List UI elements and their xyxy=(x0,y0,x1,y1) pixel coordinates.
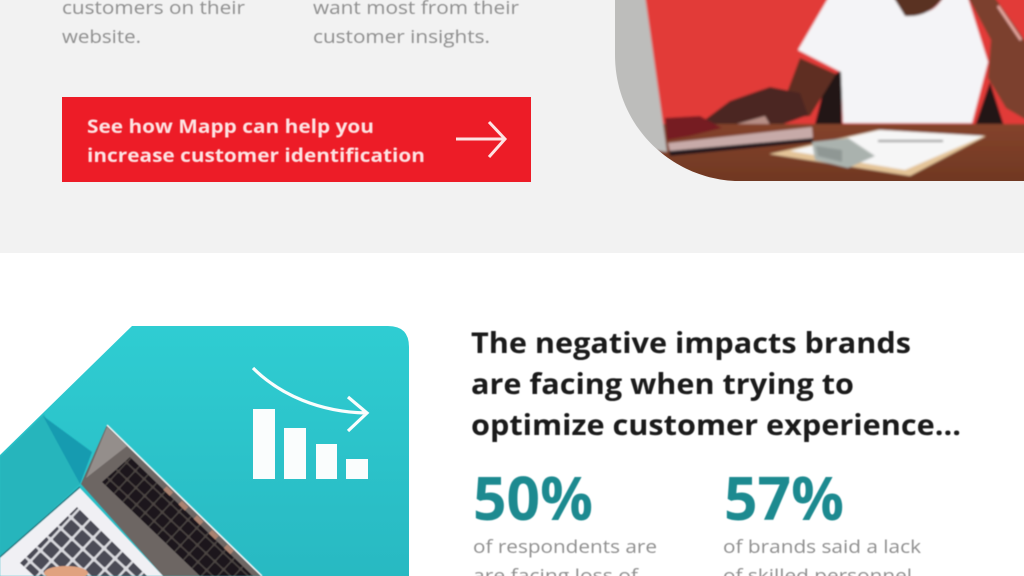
hand xyxy=(705,86,808,126)
glass xyxy=(812,138,875,168)
chair xyxy=(815,70,1004,126)
laptop shadow xyxy=(43,416,92,484)
heading: negative impacts: optimize customer experience... xyxy=(471,405,961,444)
table xyxy=(656,122,1024,181)
laptop lid xyxy=(81,425,262,576)
photo: man working at a laptop xyxy=(610,0,1024,185)
top section background xyxy=(0,0,1024,253)
call to action button: See how Mapp can help you xyxy=(87,114,374,139)
text block: customers on their website xyxy=(62,0,246,49)
stat: 57 percent: 57% xyxy=(724,456,844,538)
laptop base xyxy=(668,127,813,152)
stat: 57 percent xyxy=(723,456,922,576)
panel: teal laptop image xyxy=(0,326,409,576)
stat: 50 percent: 50% xyxy=(473,456,593,538)
lid keyboard xyxy=(102,457,253,576)
stat: 57 percent: of brands said a lack xyxy=(723,535,922,559)
hand xyxy=(44,566,88,576)
laptop base xyxy=(0,488,163,576)
heading: negative impacts: The negative impacts brands xyxy=(471,323,911,362)
heading: negative impacts: are facing when trying to xyxy=(471,364,854,403)
stat: 50 percent xyxy=(473,456,657,576)
clipboard xyxy=(769,130,986,176)
text block: want most from their customer insights: customer insights. xyxy=(313,25,490,49)
icon: declining bar chart with arrow xyxy=(253,368,368,479)
call to action button: increase customer identification xyxy=(87,143,425,168)
stat: 50 percent: of respondents are xyxy=(473,535,657,559)
far arm xyxy=(967,0,1024,122)
call to action button xyxy=(62,97,531,182)
desk shade xyxy=(0,414,80,544)
keyboard reflection xyxy=(165,488,240,560)
text block: want most from their customer insights xyxy=(313,0,520,49)
text block: customers on their website: website. xyxy=(62,25,141,49)
laptop lid xyxy=(610,0,667,152)
near arm xyxy=(782,58,836,118)
shirt xyxy=(798,0,988,123)
base keyboard xyxy=(20,507,147,576)
icon: right arrow xyxy=(456,122,505,157)
heading: negative impacts xyxy=(471,323,961,444)
